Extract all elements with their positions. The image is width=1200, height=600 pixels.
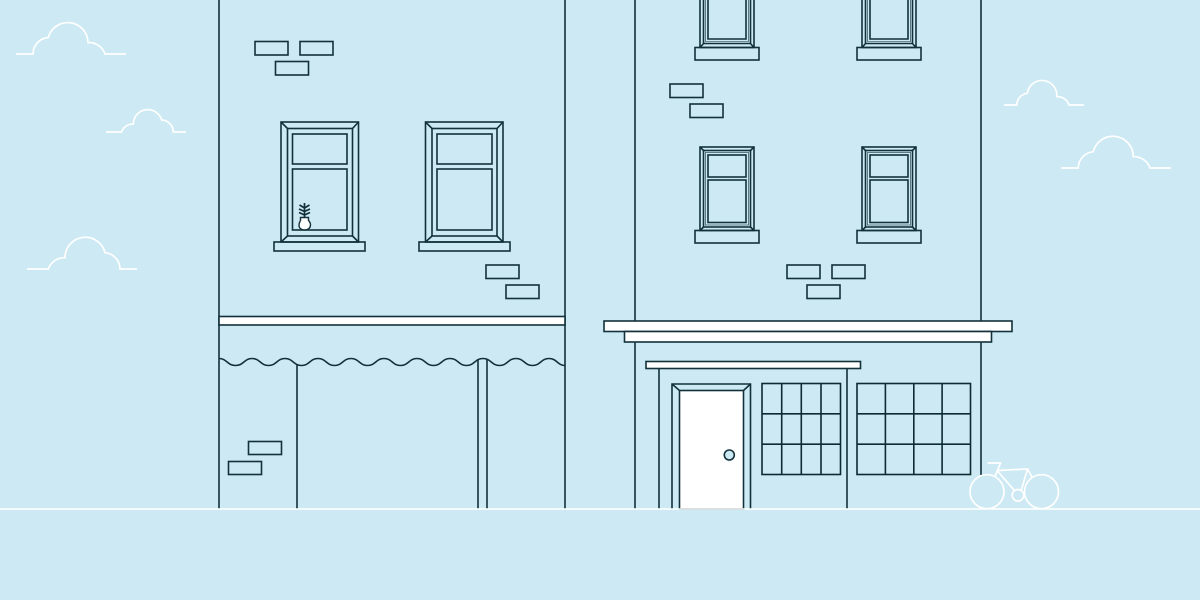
shop window: left (762, 384, 840, 474)
left building walls (219, 0, 565, 509)
brick group: bottom left (228, 442, 282, 474)
brick group: top (255, 42, 333, 75)
clouds (16, 23, 1171, 269)
brick group: upper (670, 84, 723, 118)
window: top left (695, 0, 759, 60)
scalloped awning edge (219, 358, 565, 366)
window: left with plant (274, 122, 365, 251)
door (672, 384, 750, 509)
brick group: lower (787, 265, 865, 298)
window: middle left (695, 147, 759, 243)
storefront posts (297, 359, 487, 509)
porch canopy (646, 362, 860, 368)
ground line (0, 508, 1200, 510)
window: top right (857, 0, 921, 60)
cornice (604, 321, 1012, 342)
cloud: upper right (1004, 80, 1084, 105)
cloud: top left (16, 23, 126, 54)
window: right (419, 122, 510, 251)
cloud: middle left (106, 110, 186, 132)
icon: potted plant (299, 203, 310, 230)
window: middle right (857, 147, 921, 243)
icon: bicycle (970, 463, 1058, 509)
building: left (219, 0, 565, 509)
brick group: right of window (486, 265, 539, 298)
door knob (724, 450, 734, 460)
cloud: lower left (27, 237, 137, 269)
awning bar (219, 316, 565, 325)
building: right (604, 0, 1012, 509)
right building walls (635, 0, 981, 509)
porch posts (659, 368, 847, 509)
shop window: right (857, 384, 970, 474)
cloud: lower right (1061, 136, 1171, 168)
